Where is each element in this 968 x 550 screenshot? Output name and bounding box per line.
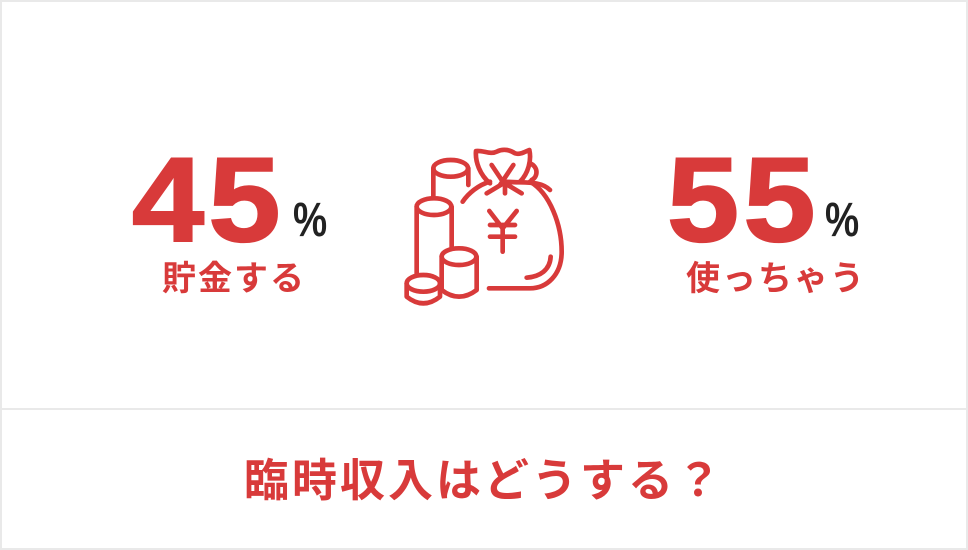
percent sign: % [293,194,327,247]
number 55: 55 [667,133,820,267]
icon: money bag and coins [404,148,564,306]
number 45: 45 [132,133,285,267]
title: 臨時収入はどうする？ [244,455,724,506]
divider above title [0,408,968,410]
label: save: 貯金する [162,260,306,298]
stat: save 45% [132,133,327,298]
percent sign: % [825,194,859,247]
label: spend: 使っちゃう [686,260,866,298]
stat: spend 55% [667,133,866,298]
